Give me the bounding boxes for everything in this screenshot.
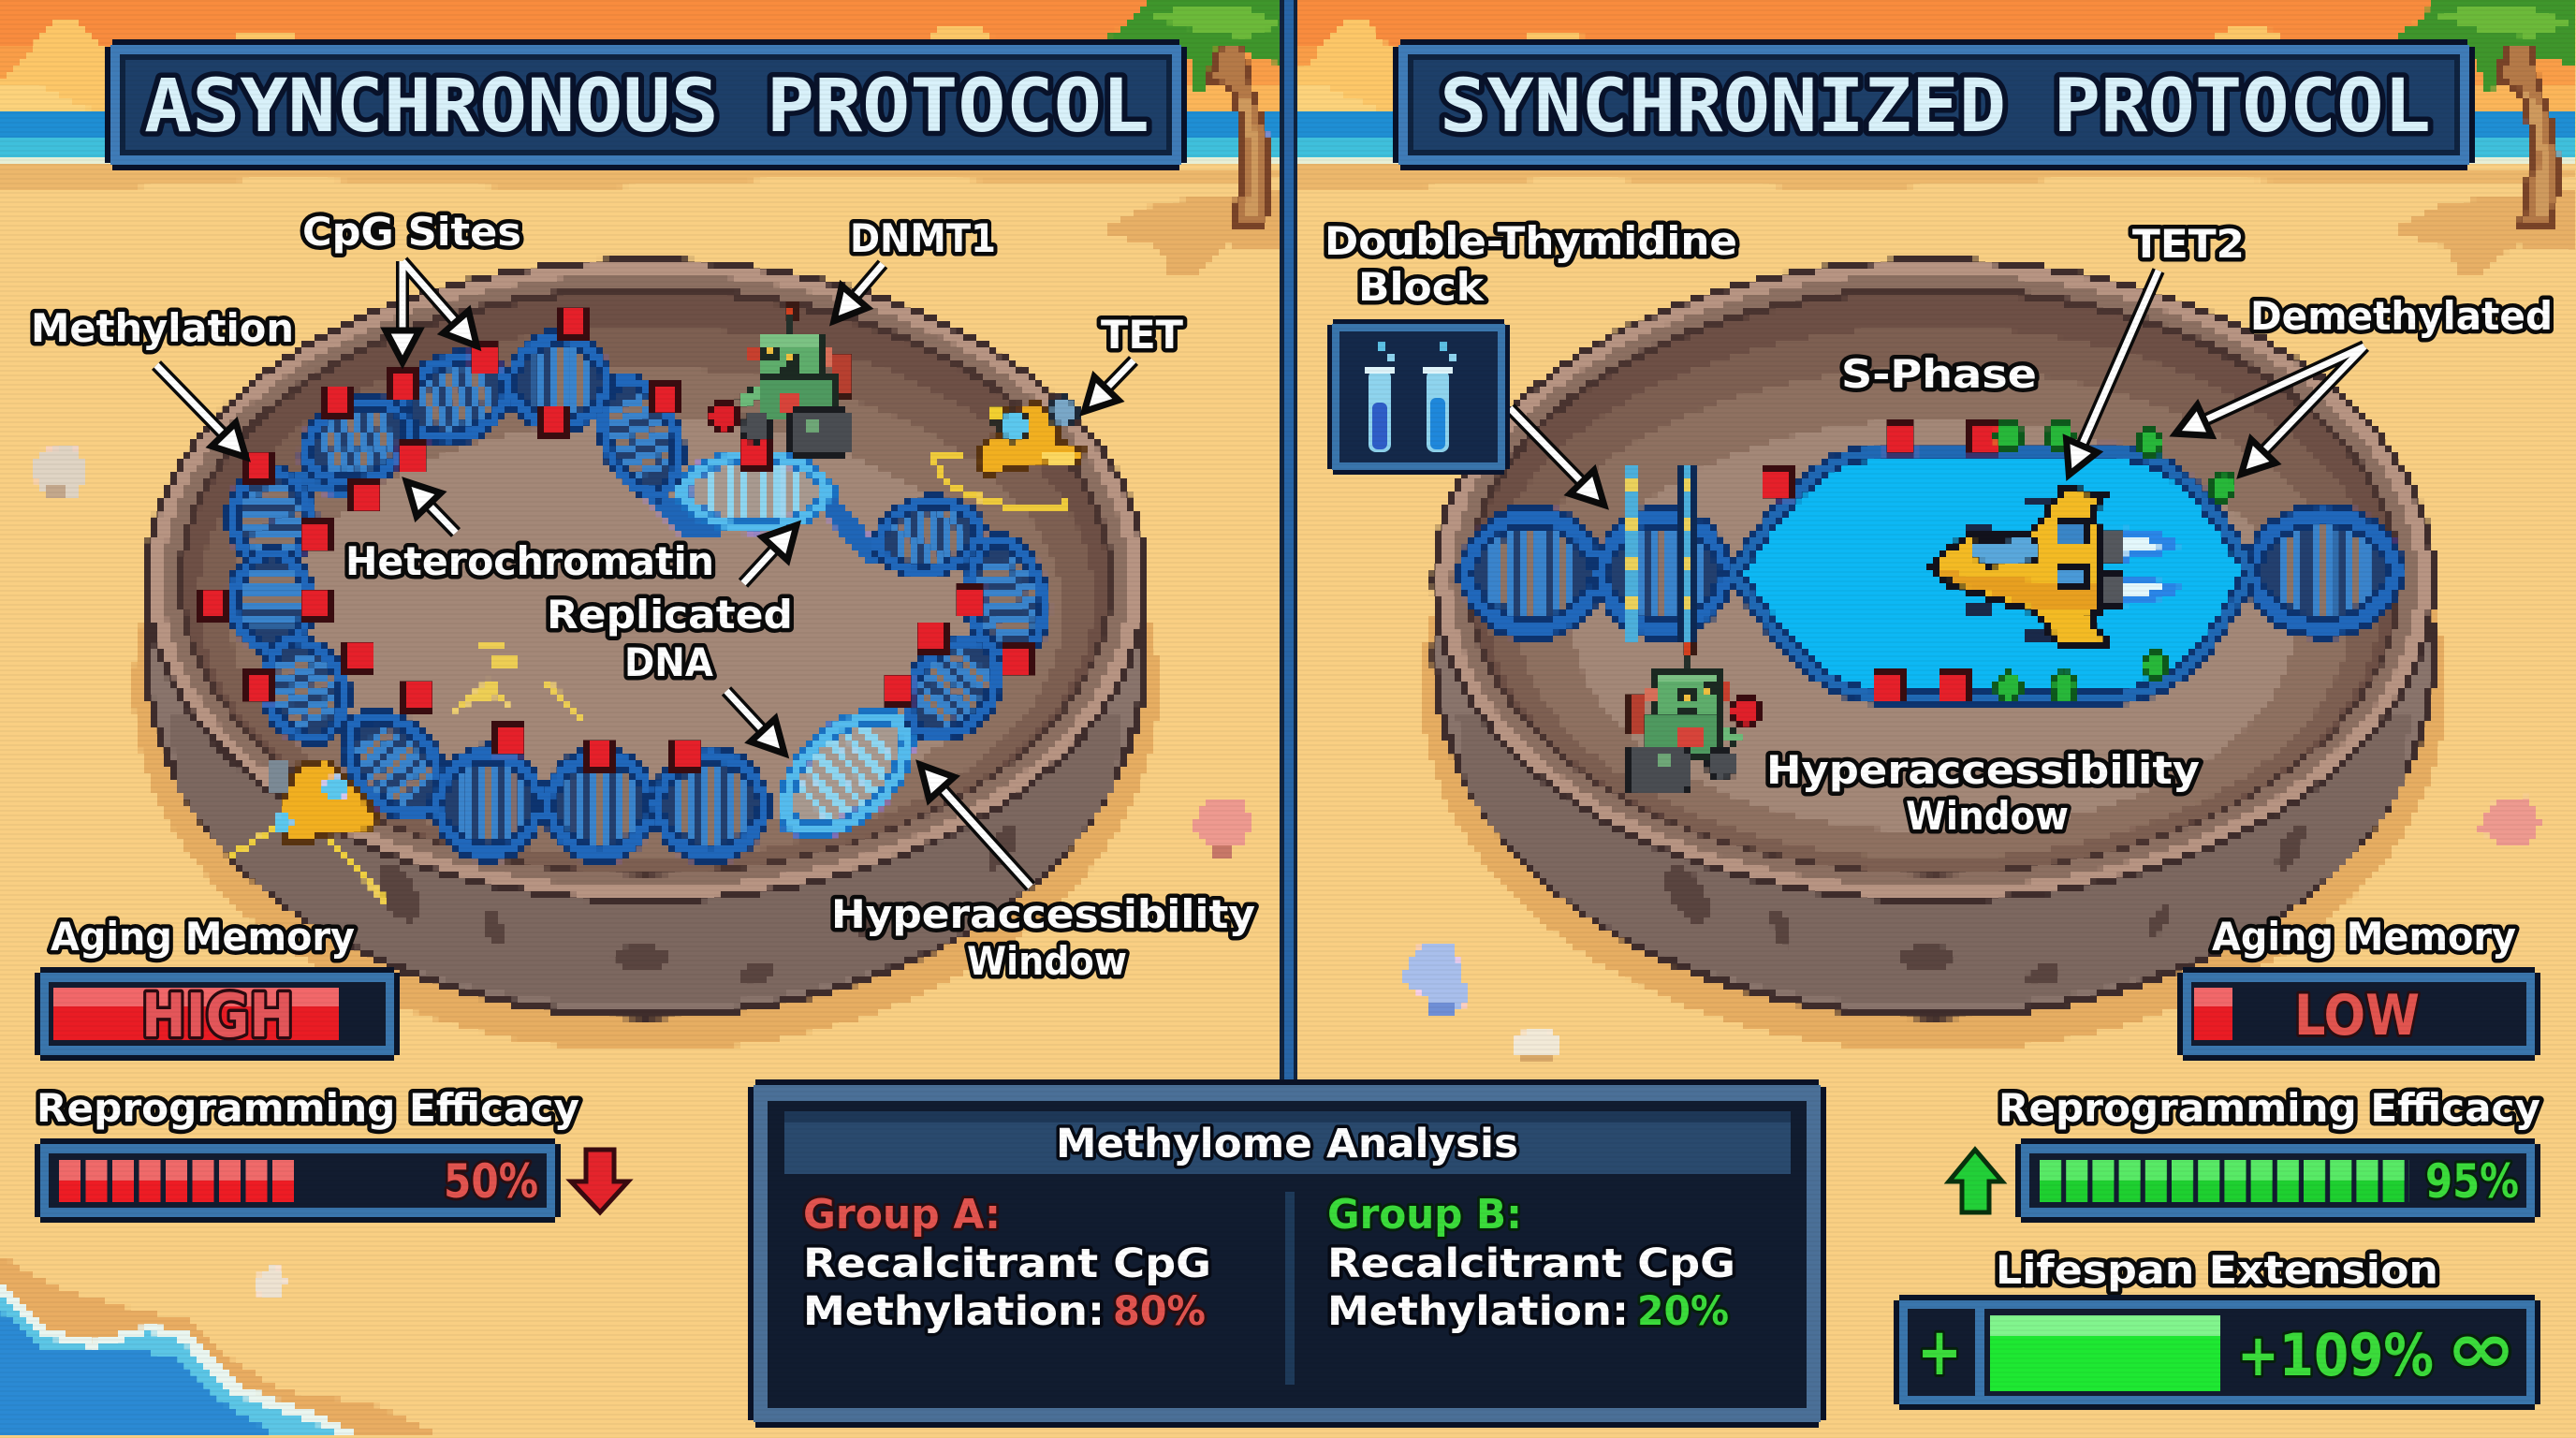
arrow: TET2 — [2082, 271, 2159, 446]
stat: Aging Memory, low: Aging Memory — [2212, 914, 2516, 960]
title: asynchronous protocol — [105, 39, 1187, 170]
group A text: Recalcitrant CpG — [803, 1240, 1211, 1287]
arrows: demethylated, pair — [2204, 346, 2364, 451]
label: Double-Thymidine Block — [1325, 218, 1737, 310]
icon: TET ship, lower — [225, 760, 386, 901]
dish: left — [133, 257, 1159, 1051]
stat: Aging Memory, high: HIGH — [141, 982, 294, 1051]
label: Methylation: Methylation — [31, 305, 294, 351]
label: Double-Thymidine Block: Double-Thymidine — [1325, 218, 1737, 264]
icon: thymidine test tubes — [1327, 319, 1510, 475]
stat: Aging Memory, low: LOW — [2294, 983, 2420, 1049]
arrow: heterochromatin — [429, 505, 456, 533]
efficacy segments, green — [2040, 1160, 2409, 1202]
label: Hyperaccessibility Window, left — [831, 891, 1255, 984]
stat: Lifespan Extension: + — [1917, 1313, 1962, 1390]
arrow: hyperaccessibility window — [942, 788, 1031, 887]
group B text: 20% — [1637, 1288, 1729, 1335]
panel header: Methylome Analysis — [1056, 1121, 1518, 1167]
stat: Lifespan Extension — [1894, 1247, 2540, 1410]
group B text: Recalcitrant CpG — [1327, 1240, 1735, 1287]
arrow: replicated DNA, up — [743, 549, 775, 583]
methylation markers: right — [1763, 422, 2234, 701]
group A text: Methylation: — [803, 1288, 1105, 1335]
panel: methylome analysis — [748, 1079, 1826, 1428]
DNA loop: left dish — [229, 338, 1053, 855]
methylation markers: left — [199, 307, 1031, 770]
background: right beach — [1288, 0, 2576, 1438]
title: asynchronous protocol: ASYNCHRONOUS PROTOCOL — [144, 65, 1149, 149]
label: S-Phase: S-Phase — [1841, 351, 2037, 397]
stat: Reprogramming Efficacy 95%: Reprogramming Efficacy — [1998, 1085, 2540, 1131]
dish: right — [1421, 257, 2447, 1051]
DNA with replication bubble: right dish — [1465, 451, 2397, 697]
icon: TET2 ship — [1933, 490, 2184, 648]
title: synchronized protocol — [1393, 39, 2475, 170]
arrow: methylation — [156, 365, 224, 434]
arrow: DNMT1 — [855, 264, 883, 297]
shells on the sand — [33, 448, 2540, 1299]
replication bubble: S-phase — [1734, 451, 2251, 697]
label: Heterochromatin: Heterochromatin — [345, 538, 714, 584]
label: Hyperaccessibility Window, right: Hyperaccessibility — [1766, 747, 2200, 793]
group A text: 80% — [1113, 1288, 1206, 1335]
label: Replicated DNA: DNA — [624, 639, 713, 685]
stat: Reprogramming Efficacy 95% — [1998, 1085, 2540, 1223]
group B text — [1327, 1191, 1735, 1335]
stat: Reprogramming Efficacy 50% — [35, 1085, 579, 1223]
background: left beach — [0, 0, 1288, 1438]
label: DNMT1: DNMT1 — [850, 215, 996, 261]
panel header — [784, 1111, 1791, 1174]
stat: Lifespan Extension: ∞ — [2446, 1306, 2516, 1389]
label: Replicated DNA — [547, 592, 793, 685]
stat: Aging Memory, high: Aging Memory — [51, 914, 355, 960]
arrow: replicated DNA, down — [726, 691, 763, 730]
stat: Lifespan Extension: Lifespan Extension — [1996, 1247, 2438, 1293]
efficacy segments, red — [59, 1160, 296, 1202]
stat: Aging Memory, low — [2177, 914, 2540, 1061]
divider between protocols — [1280, 0, 1297, 1082]
group B text: Group B: — [1327, 1191, 1522, 1239]
label: Hyperaccessibility Window, left: Hyperaccessibility — [831, 891, 1255, 937]
label: Double-Thymidine Block: Block — [1358, 264, 1485, 310]
arrow: TET — [1106, 360, 1134, 389]
label: TET: TET — [1101, 312, 1183, 358]
group A text — [803, 1191, 1211, 1335]
icon: DNMT1 robot — [709, 305, 852, 455]
label: Hyperaccessibility Window, left: Window — [967, 938, 1127, 984]
label: Replicated DNA: Replicated — [547, 592, 793, 638]
label: Hyperaccessibility Window, right — [1766, 747, 2200, 839]
group A text: Group A: — [803, 1191, 1001, 1239]
thymidine block bars — [1623, 463, 1695, 643]
label: CpG Sites: CpG Sites — [302, 209, 521, 255]
icon: TET ship, upper — [929, 398, 1084, 507]
label: Demethylated: Demethylated — [2250, 293, 2553, 339]
stat: Reprogramming Efficacy 50%: 50% — [444, 1154, 538, 1209]
title: synchronized protocol: SYNCHRONIZED PROTOCOL — [1440, 65, 2431, 149]
stat: Aging Memory, high — [35, 914, 400, 1061]
icon: green up arrow — [1949, 1150, 2002, 1212]
group B text: Methylation: — [1327, 1288, 1629, 1335]
icon: red down arrow — [571, 1150, 628, 1212]
stat: Lifespan Extension: +109% — [2237, 1321, 2434, 1389]
shoreline at bottom-left — [0, 1255, 444, 1438]
stat: Reprogramming Efficacy 50%: Reprogramming Efficacy — [37, 1085, 579, 1131]
icon: robot, right dish — [1627, 642, 1760, 792]
arrow: CpG sites, pair — [402, 261, 456, 330]
arrow: thymidine block — [1510, 408, 1582, 482]
label: Hyperaccessibility Window, right: Window — [1906, 793, 2069, 839]
stat: Reprogramming Efficacy 95%: 95% — [2425, 1154, 2519, 1209]
label: TET2: TET2 — [2132, 221, 2245, 267]
yellow motion sparks — [451, 641, 590, 723]
